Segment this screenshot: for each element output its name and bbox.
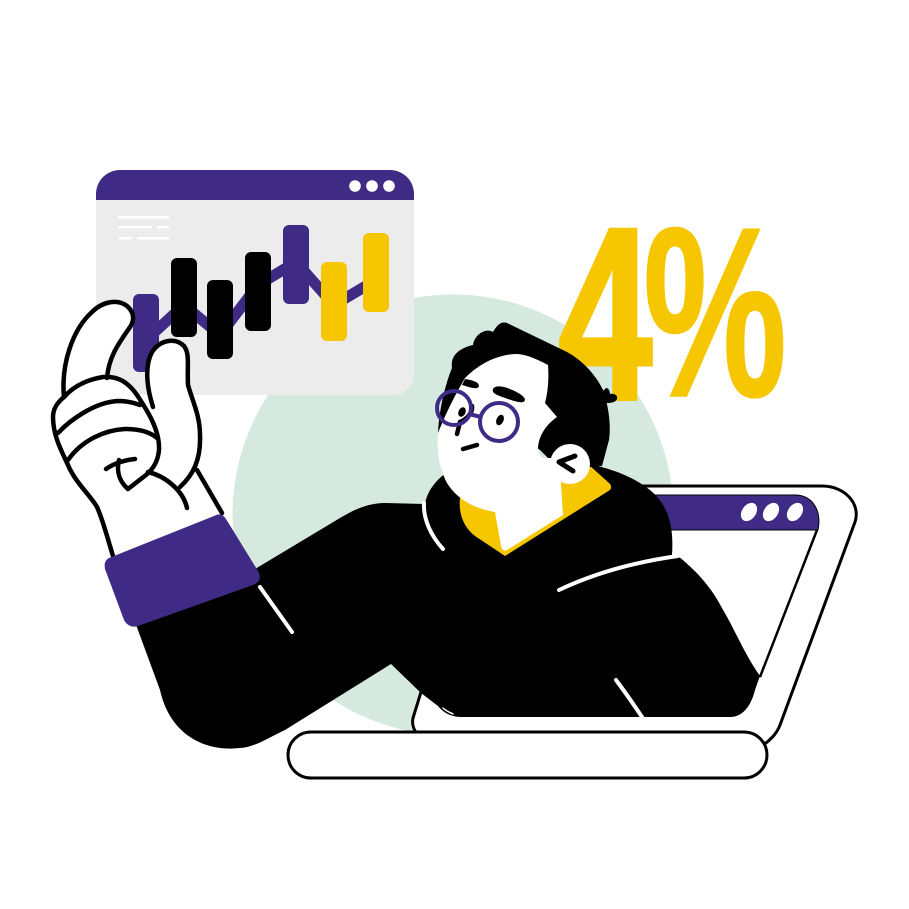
hand bbox=[53, 302, 225, 560]
window body bbox=[96, 198, 414, 395]
face bbox=[437, 354, 560, 515]
cuff bbox=[105, 514, 260, 627]
4% figure: 4 bbox=[558, 177, 652, 451]
hair bbox=[438, 322, 610, 470]
window title bar bbox=[96, 170, 414, 200]
person bbox=[135, 322, 760, 749]
ear bbox=[550, 444, 590, 484]
glasses bbox=[437, 391, 518, 441]
outer wrist bbox=[53, 397, 113, 556]
laptop base bbox=[288, 732, 767, 778]
text lines bbox=[118, 216, 169, 240]
laptop screen bbox=[413, 486, 856, 743]
ear detail bbox=[559, 456, 575, 471]
background circle bbox=[232, 294, 674, 736]
hoodie white lines bbox=[260, 503, 678, 717]
eyebrows bbox=[462, 379, 525, 402]
chart window panel bbox=[96, 170, 414, 395]
eyes bbox=[457, 406, 505, 426]
thumb bbox=[147, 341, 200, 487]
finger lines bbox=[58, 401, 222, 513]
index finger bbox=[64, 302, 133, 397]
laptop dots bbox=[738, 500, 806, 524]
hoodie and arm bbox=[135, 466, 760, 749]
4% figure: % bbox=[643, 176, 787, 448]
screen edge bbox=[760, 530, 817, 677]
window dots bbox=[349, 180, 395, 192]
trend line bbox=[146, 262, 376, 340]
neck bbox=[480, 470, 563, 551]
knuckles bbox=[64, 377, 159, 489]
laptop frame bbox=[413, 486, 856, 743]
laptop title bar bbox=[650, 495, 819, 530]
palm fill bbox=[53, 377, 225, 560]
candlestick bars bbox=[133, 225, 389, 372]
4% figure bbox=[558, 176, 787, 451]
nose and mouth bbox=[457, 406, 477, 449]
yellow collar bbox=[460, 464, 611, 556]
hair tuft bbox=[602, 388, 617, 403]
